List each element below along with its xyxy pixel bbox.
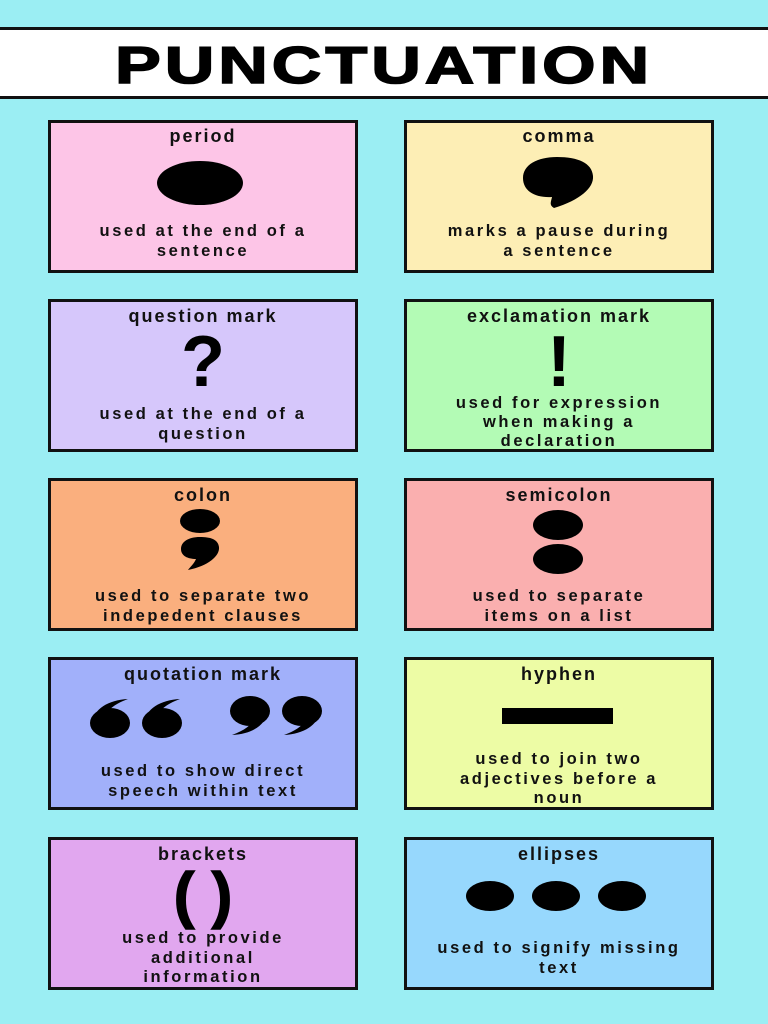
description: hyphen: used to join two <box>475 750 643 768</box>
description: exclamation mark: declaration <box>501 432 617 450</box>
description: semicolon: used to separate <box>473 587 645 605</box>
icon: semicolon (two dots) <box>533 510 583 574</box>
description: period: used at the end of a <box>100 222 306 240</box>
panel: period <box>48 120 358 273</box>
heading: question mark: question mark <box>128 306 278 326</box>
heading: colon: colon <box>174 485 232 505</box>
description: brackets: information <box>143 968 263 986</box>
description: question mark <box>100 405 306 442</box>
heading: comma: comma <box>522 126 596 146</box>
description: brackets: additional <box>151 948 255 966</box>
description: semicolon <box>473 587 645 624</box>
description: ellipses <box>437 939 681 976</box>
panel: ellipses <box>404 837 714 990</box>
panel: semicolon <box>404 478 714 631</box>
description: semicolon: items on a list <box>484 606 634 624</box>
heading: hyphen: hyphen <box>521 664 597 684</box>
icon: colon (semicolon shape) <box>180 509 220 570</box>
icon: quotation marks <box>90 696 322 738</box>
icon: exclamation mark: ! <box>547 322 571 402</box>
description: comma: a sentence <box>503 242 615 260</box>
panel: hyphen <box>404 657 714 810</box>
description: period: sentence <box>157 242 249 260</box>
heading: semicolon: semicolon <box>505 485 613 505</box>
description: ellipses: text <box>539 958 579 976</box>
heading: brackets: brackets <box>158 844 248 864</box>
heading: exclamation mark: exclamation mark <box>467 306 651 326</box>
panel: colon <box>48 478 358 631</box>
heading: quotation mark: quotation mark <box>124 664 282 684</box>
description: brackets <box>122 929 284 986</box>
description: question mark: question <box>158 424 248 442</box>
icon: brackets: ( ) <box>174 861 232 930</box>
description: quotation mark <box>101 762 305 800</box>
description: exclamation mark: when making a <box>483 413 635 431</box>
icon: question mark: ? <box>181 322 225 402</box>
heading: ellipses: ellipses <box>518 844 600 864</box>
description: colon <box>95 587 311 624</box>
title <box>0 27 768 99</box>
icon: hyphen bar <box>502 708 613 724</box>
description: hyphen: noun <box>534 789 584 807</box>
icon: ellipsis dots <box>466 881 646 911</box>
description: quotation mark: used to show direct <box>101 762 305 780</box>
icon: comma <box>523 157 593 208</box>
description: period <box>100 222 306 260</box>
description: hyphen: adjectives before a <box>460 770 658 788</box>
icon: period dot <box>157 161 243 205</box>
description: colon: indepedent clauses <box>103 606 303 624</box>
description: comma: marks a pause during <box>448 222 670 240</box>
description: question mark: used at the end of a <box>100 405 306 423</box>
panel: question mark <box>48 299 358 452</box>
description: hyphen <box>460 750 658 807</box>
description: exclamation mark: used for expression <box>456 394 662 412</box>
heading: period: period <box>169 126 236 146</box>
description: exclamation mark <box>456 394 662 450</box>
panel: comma <box>404 120 714 273</box>
description: quotation mark: speech within text <box>108 782 298 800</box>
panel: brackets <box>48 837 358 990</box>
description: brackets: used to provide <box>122 929 284 947</box>
panel: exclamation mark <box>404 299 714 452</box>
description: ellipses: used to signify missing <box>437 939 681 957</box>
description: colon: used to separate two <box>95 587 311 605</box>
description: comma <box>448 222 670 260</box>
panel: quotation mark <box>48 657 358 810</box>
title: PUNCTUATION <box>115 37 653 95</box>
